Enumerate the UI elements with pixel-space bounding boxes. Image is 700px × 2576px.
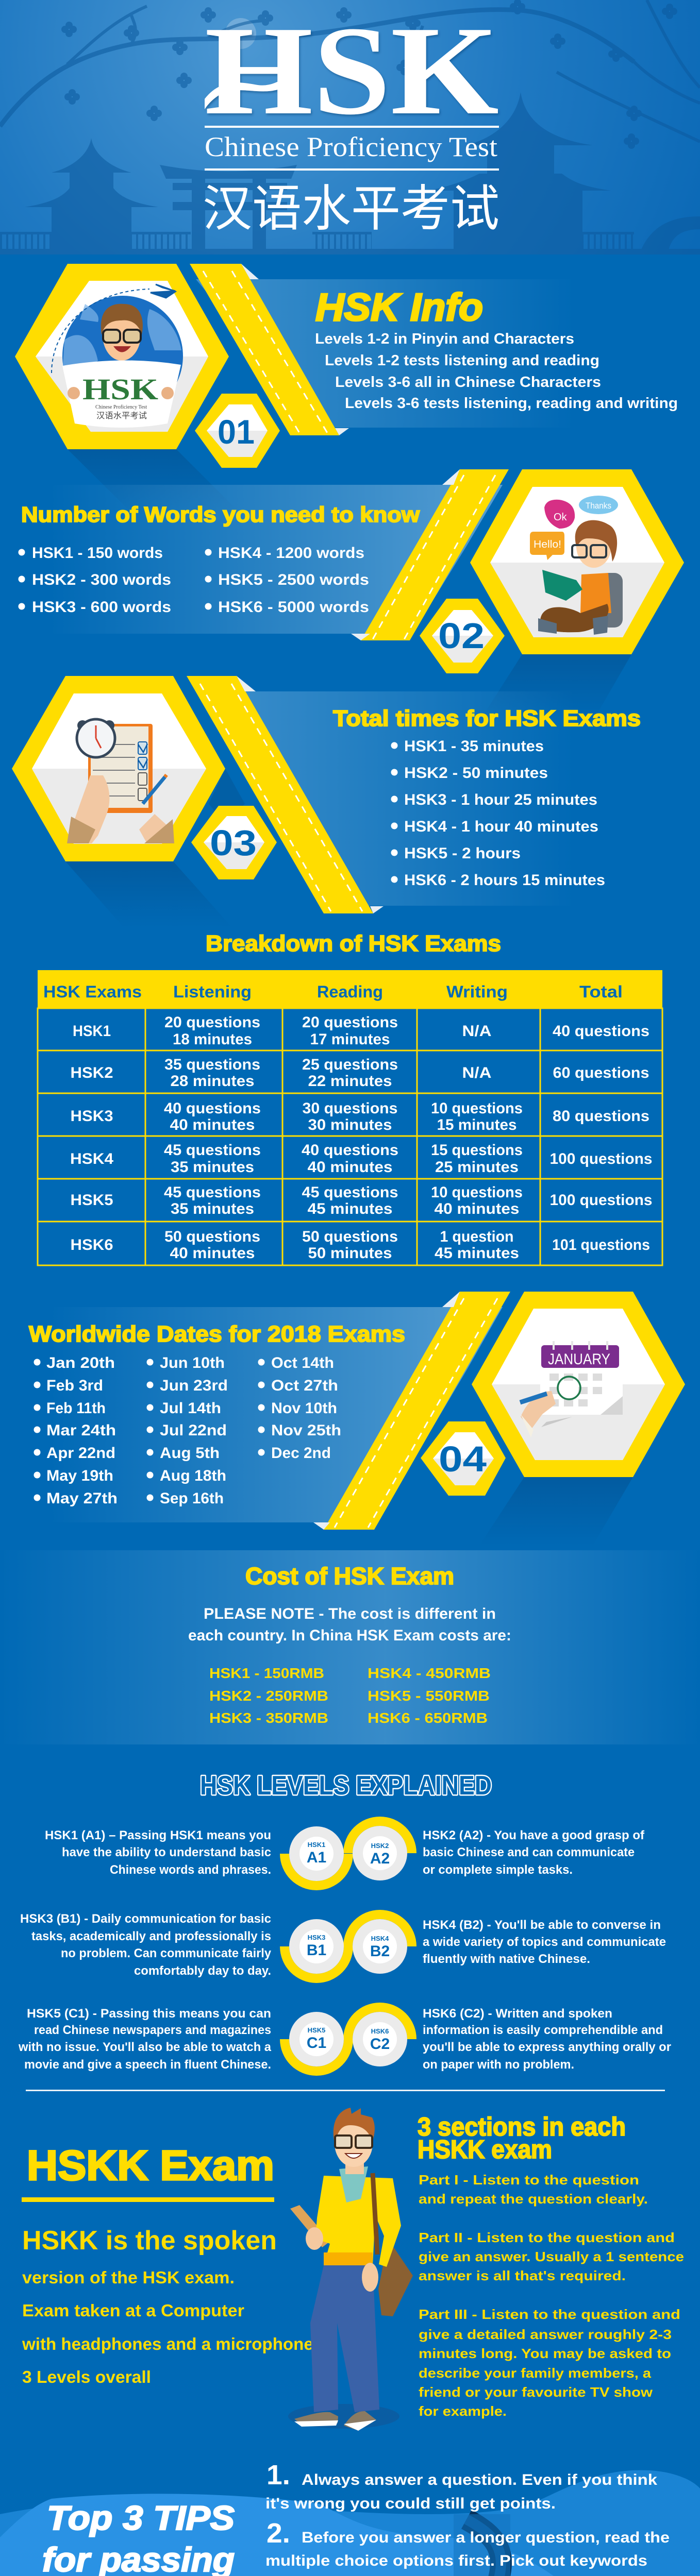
info lines: [315, 331, 678, 412]
table row HSK5: 45 questions: [302, 1184, 398, 1201]
times list: HSK4 - 1 hour 40 minutes: [404, 818, 598, 835]
number hexagon 04: [421, 1421, 506, 1496]
table header: Listening: [173, 982, 252, 1001]
dates column 2: Jul 22nd: [160, 1422, 227, 1439]
badge C1 C2: [280, 2003, 416, 2076]
dates column 2: Aug 18th: [160, 1467, 226, 1484]
table row HSK1: N/A: [462, 1023, 492, 1040]
tip 2: [265, 2518, 678, 2576]
badge B1 B2: HSK3: [308, 1934, 325, 1941]
left text: movie and give a speech in fluent Chinese.: [24, 2058, 271, 2072]
plane: [151, 284, 175, 298]
table header: HSK Exams: [43, 982, 142, 1001]
left text: HSK3 (B1) - Daily communication for basic: [20, 1912, 271, 1926]
part III: Part III - Listen to the question and: [419, 2307, 680, 2322]
badge C1 C2: C1: [307, 2035, 326, 2052]
heading: HSK levels explained: HSK LEVELS EXPLAINED: [200, 1771, 492, 1801]
table row HSK5: 45 minutes: [307, 1200, 393, 1217]
word list column 2: HSK6 - 5000 words: [218, 599, 369, 616]
table row HSK3: 40 minutes: [170, 1116, 255, 1133]
right text: HSK6 (C2) - Written and spoken: [423, 2007, 612, 2021]
dates column 2: Jun 10th: [160, 1354, 225, 1371]
hexagon shadow: [479, 654, 631, 721]
badge A1 A2: A2: [370, 1850, 390, 1867]
table row HSK4: 25 minutes: [435, 1159, 519, 1176]
dates column 1: May 27th: [46, 1490, 118, 1507]
section 2: Number of words: [0, 469, 684, 721]
part III: for example.: [419, 2403, 507, 2419]
left text: [18, 2007, 272, 2072]
table row HSK4: HSK4: [70, 1150, 113, 1167]
word list column 1: HSK3 - 600 words: [32, 599, 171, 616]
heading: HSK Info: HSK Info: [315, 285, 483, 329]
moon: [225, 18, 256, 49]
dates column 3: Dec 2nd: [271, 1445, 331, 1462]
table row HSK3: 30 minutes: [308, 1116, 392, 1133]
panel band: [196, 279, 700, 428]
table row HSK2: 35 questions: [164, 1056, 260, 1073]
part I: [419, 2172, 648, 2207]
left text: [45, 1828, 271, 1877]
part III: friend or your favourite TV show: [419, 2384, 653, 2400]
icon: january calendar: JANUARY: [548, 1351, 610, 1368]
table row HSK3: 15 minutes: [437, 1116, 516, 1133]
icon: man with globe and HSK paper: 汉语水平考试: [96, 409, 147, 421]
right text: HSK2 (A2) - You have a good grasp of: [423, 1828, 645, 1842]
table row HSK5: 100 questions: [549, 1192, 653, 1209]
table row HSK5: 10 questions: [431, 1184, 523, 1201]
dates column 1: May 19th: [46, 1467, 113, 1484]
table row HSK1: 40 questions: [553, 1023, 649, 1040]
panel: cost of HSK exam: [0, 1550, 700, 1744]
icon: student reading: Thanks: [586, 501, 611, 511]
number hexagon 01: [195, 394, 280, 468]
table row HSK2: 22 minutes: [308, 1073, 392, 1090]
yellow hexagon: [472, 1292, 685, 1477]
dates column 2: [146, 1354, 228, 1507]
HSKK description: version of the HSK exam.: [22, 2268, 235, 2287]
cost list column 2: HSK6 - 650RMB: [368, 1710, 488, 1726]
section: HSKK exam: [22, 2108, 684, 2431]
levels row 3: [18, 2003, 671, 2076]
table row HSK4: 15 questions: [431, 1142, 523, 1159]
word list column 1: HSK1 - 150 words: [32, 545, 163, 562]
hexagon shadow: [479, 1477, 633, 1546]
badge B1 B2: B1: [307, 1942, 326, 1959]
dates column 1: Feb 11th: [46, 1400, 106, 1417]
word list column 2: HSK5 - 2500 words: [218, 571, 369, 588]
badge A1 A2: [280, 1817, 416, 1890]
badge B1 B2: B2: [370, 1943, 390, 1960]
part III: describe your family members, a: [419, 2365, 652, 2381]
tip 1: [265, 2460, 657, 2512]
left text: HSK1 (A1) – Passing HSK1 means you: [45, 1828, 271, 1842]
info lines: Levels 3-6 all in Chinese Characters: [335, 374, 601, 391]
title: HSK: HSK: [205, 1, 499, 141]
dates column 2: Aug 5th: [160, 1445, 220, 1462]
table row HSK6: 101 questions: [552, 1236, 650, 1253]
hexagon shadow: [65, 861, 232, 927]
HSKK description: 3 Levels overall: [22, 2367, 151, 2386]
illustration: student with bag: [288, 2108, 413, 2431]
tip 2: 2.: [266, 2518, 290, 2549]
left text: comfortably day to day.: [134, 1964, 271, 1978]
table row HSK1: 17 minutes: [310, 1031, 390, 1048]
heading: Top 3 tips: [42, 2499, 237, 2576]
section 4: worldwide dates: [0, 1292, 685, 1546]
badge A1 A2: A1: [307, 1849, 326, 1866]
table row HSK1: 20 questions: [302, 1014, 398, 1031]
badge B1 B2: HSK4: [371, 1935, 389, 1942]
icon: man with globe and HSK paper: Chinese Proficiency Test: [95, 404, 147, 410]
panel band: [0, 1307, 503, 1522]
info lines: Levels 3-6 tests listening, reading and writing: [345, 395, 678, 412]
badge B1 B2: [280, 1910, 416, 1983]
dates column 1: [34, 1354, 118, 1507]
number hexagon 03: 03: [210, 823, 257, 863]
table row HSK6: 40 minutes: [170, 1245, 255, 1262]
badge C1 C2: HSK6: [371, 2027, 389, 2035]
dates column 3: Nov 10th: [271, 1400, 337, 1417]
times list: [391, 738, 605, 889]
inner hexagon: [492, 1309, 665, 1460]
tip 2: Before you answer a longer question, read the: [302, 2529, 670, 2546]
table row HSK1: [73, 1014, 649, 1048]
badge C1 C2: HSK5: [308, 2026, 325, 2034]
right text: basic Chinese and can communicate: [423, 1845, 635, 1859]
table header: Writing: [446, 982, 508, 1001]
badge C1 C2: C2: [370, 2036, 390, 2053]
panel band: [196, 691, 700, 906]
wavy background: tips section: [0, 2470, 700, 2576]
number hexagon 03: [191, 806, 277, 879]
left text: with no issue. You'll also be able to watch a: [18, 2040, 272, 2054]
word list column 1: HSK2 - 300 words: [32, 571, 171, 588]
tip 1: Always answer a question. Even if you think: [302, 2471, 657, 2488]
left text: [20, 1912, 272, 1978]
cost list column 1: HSK3 - 350RMB: [209, 1710, 328, 1726]
tip 2: multiple choice options first. Pick out keywords: [265, 2552, 647, 2569]
right text: [423, 2007, 671, 2072]
times list: HSK2 - 50 minutes: [404, 765, 548, 782]
number hexagon 04: 04: [439, 1439, 487, 1479]
table row HSK6: 50 minutes: [308, 1245, 392, 1262]
word list column 1: [19, 545, 171, 616]
table row HSK2: 60 questions: [553, 1064, 649, 1081]
part I: Part I - Listen to the question: [419, 2172, 639, 2188]
tips list: [265, 2460, 678, 2576]
dates column 1: Feb 3rd: [46, 1377, 103, 1394]
table row HSK4: 45 questions: [164, 1142, 261, 1159]
right text: on paper with no problem.: [423, 2058, 574, 2072]
dates column 3: [258, 1354, 341, 1462]
heading: 3 sections: HSKK exam: [418, 2135, 552, 2164]
times list: HSK1 - 35 minutes: [404, 738, 544, 755]
hexagon shadow: [68, 449, 242, 515]
levels row 1: [45, 1817, 645, 1890]
cost list column 2: [368, 1665, 491, 1726]
table header: Reading: [317, 982, 383, 1001]
HSKK description: HSKK is the spoken: [22, 2226, 277, 2256]
HSKK description: [22, 2226, 318, 2386]
icon: student reading: Ok: [554, 512, 568, 523]
right text: a wide variety of topics and communicate: [423, 1935, 666, 1949]
part I: and repeat the question clearly.: [419, 2191, 648, 2207]
info lines: Levels 1-2 tests listening and reading: [325, 352, 599, 369]
left text: read Chinese newspapers and magazines: [34, 2023, 271, 2037]
table row HSK4: 100 questions: [549, 1150, 653, 1167]
heading: cost: Cost of HSK Exam: [245, 1563, 454, 1589]
section 1: HSK Info: [15, 264, 700, 515]
dates column 1: Jan 20th: [46, 1354, 115, 1371]
icon: student reading: [530, 496, 623, 635]
left text: HSK5 (C1) - Passing this means you can: [27, 2007, 271, 2021]
table row HSK1: 18 minutes: [173, 1031, 252, 1048]
table row HSK4: 40 minutes: [307, 1159, 393, 1176]
table row HSK3: 40 questions: [164, 1100, 261, 1117]
left text: Chinese words and phrases.: [110, 1863, 271, 1877]
dates column 3: Oct 14th: [271, 1354, 334, 1371]
table row HSK3: HSK3: [70, 1108, 113, 1125]
table row HSK1: HSK1: [73, 1023, 111, 1040]
rule: [205, 168, 499, 171]
table header: Total: [579, 982, 623, 1001]
table row HSK1: 20 questions: [164, 1014, 260, 1031]
chinese title: 汉语水平考试: [203, 168, 499, 240]
levels row 2: [20, 1910, 666, 1983]
table row HSK4: [70, 1142, 653, 1176]
table row HSK6: 50 questions: [164, 1228, 260, 1245]
table row HSK2: HSK2: [70, 1064, 113, 1081]
part III: give a detailed answer roughly 2-3: [419, 2327, 672, 2342]
note text: each country. In China HSK Exam costs are:: [188, 1627, 511, 1644]
heading: HSKK Exam: HSKK Exam: [27, 2142, 274, 2189]
badge A1 A2: HSK1: [308, 1841, 325, 1849]
stripe: [324, 1292, 510, 1530]
table row HSK2: [70, 1056, 649, 1090]
yellow hexagon: [15, 264, 229, 449]
stripe: [361, 469, 509, 640]
HSKK description: with headphones and a microphone.: [22, 2334, 318, 2353]
yellow rule: [22, 2197, 274, 2202]
right text: you'll be able to express anything orally or: [423, 2040, 671, 2054]
dates column 3: Oct 27th: [271, 1377, 338, 1394]
table row HSK6: 45 minutes: [435, 1245, 519, 1262]
icon: student reading: Hello!: [534, 539, 561, 550]
times list: HSK6 - 2 hours 15 minutes: [404, 872, 605, 889]
part III: [419, 2307, 680, 2419]
part III: minutes long. You may be asked to: [419, 2346, 671, 2361]
right text: HSK4 (B2) - You'll be able to converse in: [423, 1918, 661, 1932]
cost list column 2: HSK5 - 550RMB: [368, 1688, 490, 1704]
heading: 3 sections: [418, 2112, 626, 2164]
icon: january calendar: [520, 1341, 623, 1437]
icon: man with globe and HSK paper: [52, 284, 183, 428]
times list: HSK3 - 1 hour 25 minutes: [404, 791, 597, 808]
table row HSK5: 45 questions: [164, 1184, 261, 1201]
table row HSK3: 10 questions: [431, 1100, 523, 1117]
yellow hexagon: [12, 676, 225, 861]
badge A1 A2: HSK2: [371, 1842, 389, 1850]
table row HSK2: N/A: [462, 1064, 492, 1081]
icon: clock and clipboard: [67, 719, 174, 843]
HSKK description: Exam taken at a Computer: [22, 2301, 244, 2320]
left text: no problem. Can communicate fairly: [61, 1946, 272, 1960]
heading: total times: Total times for HSK Exams: [333, 706, 641, 731]
part II: answer is all that's required.: [419, 2268, 626, 2283]
dates column 3: Nov 25th: [271, 1422, 341, 1439]
cost list column 2: HSK4 - 450RMB: [368, 1665, 491, 1681]
dates column 2: Sep 16th: [160, 1490, 224, 1507]
tip 1: it's wrong you could still get points.: [265, 2495, 556, 2512]
table row HSK5: 40 minutes: [434, 1200, 520, 1217]
word list column 2: HSK4 - 1200 words: [218, 545, 364, 562]
inner hexagon: [32, 693, 206, 844]
yellow hexagon: [470, 469, 684, 654]
dates column 1: Apr 22nd: [46, 1445, 115, 1462]
heading: worldwide dates: Worldwide Dates for 2018 Exams: [29, 1321, 405, 1347]
heading: number of words: Number of Words you need to know: [21, 502, 420, 527]
table row HSK6: 50 questions: [302, 1228, 398, 1245]
heading: Top 3 tips: Top 3 TIPS: [47, 2499, 235, 2537]
table row HSK6: 1 question: [440, 1228, 513, 1245]
number hexagon 02: 02: [438, 616, 485, 656]
table row HSK6: HSK6: [70, 1236, 113, 1253]
table row HSK5: 35 minutes: [171, 1200, 254, 1217]
heading: 3 sections: 3 sections in each: [418, 2112, 626, 2141]
right text: or complete simple tasks.: [423, 1863, 573, 1877]
left text: have the ability to understand basic: [62, 1845, 271, 1859]
number hexagon 01: 01: [218, 413, 255, 451]
number hexagon 02: [420, 599, 505, 673]
table row HSK5: [70, 1184, 653, 1217]
table row HSK2: 28 minutes: [170, 1073, 255, 1090]
rule: [205, 126, 499, 128]
times list: HSK5 - 2 hours: [404, 845, 521, 862]
dates column 2: Jul 14th: [160, 1400, 221, 1417]
table row HSK3: 80 questions: [553, 1108, 649, 1125]
note text: PLEASE NOTE - The cost is different in: [204, 1605, 496, 1622]
tree branch silhouettes: [0, 0, 700, 149]
panel band: [0, 485, 503, 634]
cost list column 1: HSK1 - 150RMB: [209, 1665, 324, 1681]
note text: [188, 1605, 511, 1644]
table: breakdown of HSK exams: [38, 970, 662, 1265]
cost list column 1: [209, 1665, 328, 1726]
heading: breakdown: Breakdown of HSK Exams: [206, 931, 501, 956]
right text: fluently with native Chinese.: [423, 1952, 590, 1966]
dates column 1: Mar 24th: [46, 1422, 116, 1439]
info lines: Levels 1-2 in Pinyin and Characters: [315, 331, 574, 347]
right text: [423, 1918, 666, 1966]
tip 1: 1.: [266, 2460, 290, 2490]
part II: give an answer. Usually a 1 sentence: [419, 2249, 684, 2264]
stripe: [190, 264, 339, 435]
table row HSK3: [70, 1100, 649, 1133]
table row HSK2: 25 questions: [302, 1056, 398, 1073]
left text: tasks, academically and professionally is: [31, 1929, 271, 1943]
table row HSK4: 35 minutes: [171, 1159, 254, 1176]
dates column 2: Jun 23rd: [160, 1377, 228, 1394]
word list column 2: [205, 545, 369, 616]
header banner: [0, 0, 700, 255]
subtitle: Chinese Proficiency Test: [205, 131, 497, 162]
section 3: Total times: [12, 676, 700, 927]
inner hexagon: [490, 487, 664, 637]
right text: [423, 1828, 645, 1877]
paper: HSK logo: HSK: [82, 372, 158, 406]
inner hexagon: [36, 281, 208, 432]
illustration: great wall: [115, 2514, 593, 2576]
table grid: [38, 1008, 662, 1265]
table row HSK6: [70, 1228, 650, 1262]
table row HSK5: HSK5: [70, 1192, 113, 1209]
part II: Part II - Listen to the question and: [419, 2230, 675, 2245]
table row HSK3: 30 questions: [302, 1100, 398, 1117]
table row HSK4: 40 questions: [302, 1142, 398, 1159]
part II: [419, 2230, 684, 2283]
cost list column 1: HSK2 - 250RMB: [209, 1688, 328, 1704]
right text: information is easily comprehendible and: [423, 2023, 663, 2037]
stripe: [187, 676, 373, 913]
table header: [38, 970, 662, 1008]
temple silhouettes: [0, 92, 700, 255]
